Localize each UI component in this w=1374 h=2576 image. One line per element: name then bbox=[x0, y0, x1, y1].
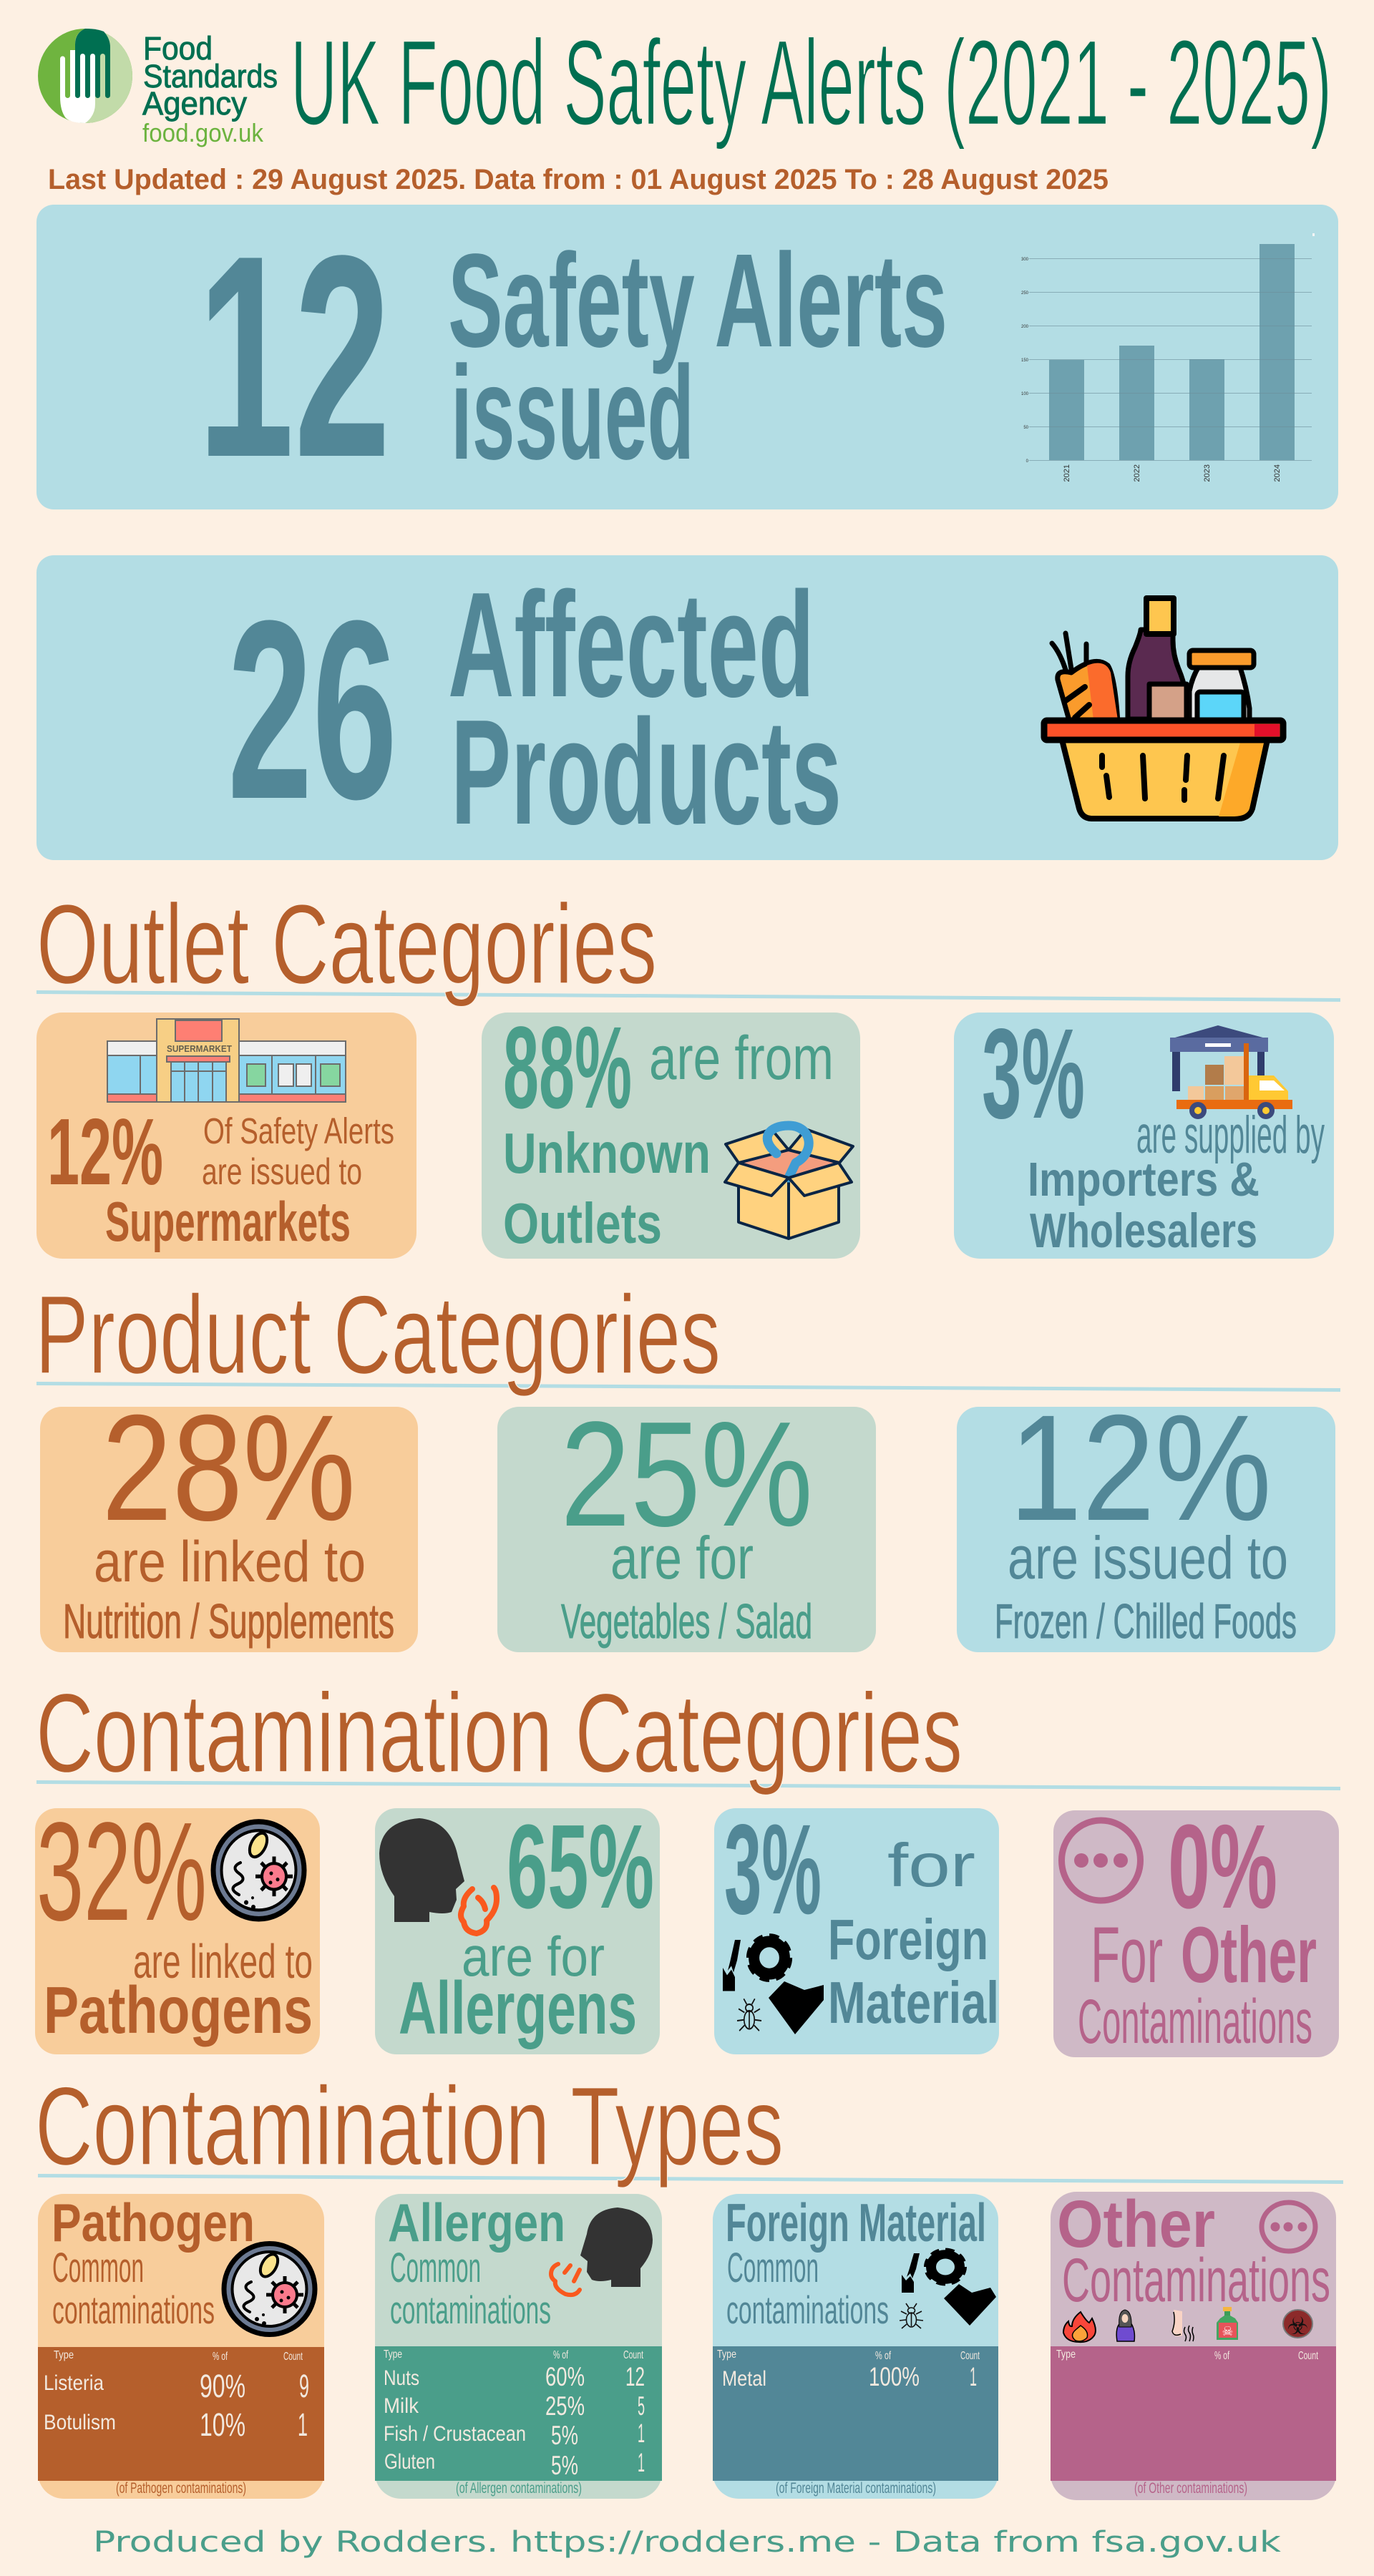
icon: poison bottle: ☠ bbox=[1222, 2324, 1234, 2339]
table: pathogen: Type bbox=[54, 2349, 74, 2361]
logo: Food Standards Agency bbox=[38, 29, 278, 147]
footnote: other: (of Other contaminations) bbox=[1134, 2480, 1247, 2497]
panel: supermarkets: SUPERMARKET bbox=[167, 1043, 232, 1054]
footnote: foreign material: (of Foreign Material contaminations) bbox=[776, 2480, 936, 2497]
panel: importers and wholesalers bbox=[954, 1002, 1334, 1259]
text: for: for bbox=[887, 1832, 975, 1900]
heading: outlet categories: Outlet Categories bbox=[36, 882, 657, 1008]
stat: 0 percent: 0% bbox=[1168, 1800, 1277, 1933]
text: pathogens: Pathogens bbox=[44, 1973, 313, 2047]
table: pathogen: 9 bbox=[299, 2368, 309, 2404]
table: pathogen bbox=[38, 2347, 324, 2481]
text: common: Common bbox=[52, 2245, 144, 2291]
bar chart: alerts per year: 250 bbox=[1021, 291, 1029, 296]
icon: head coughing bbox=[379, 1818, 497, 1933]
icon: person with hand at mouth bbox=[1116, 2310, 1134, 2341]
logo: Food Standards Agency: food.gov.uk bbox=[142, 118, 264, 147]
icon: poison bottle bbox=[1217, 2307, 1238, 2340]
table: allergen: 12 bbox=[625, 2362, 645, 2391]
table: allergen: 5 bbox=[638, 2391, 645, 2421]
table: pathogen: Listeria bbox=[44, 2371, 104, 2395]
table: pathogen: 10% bbox=[200, 2406, 245, 2443]
panel: allergens bbox=[375, 1800, 660, 2054]
stat: 32 percent: 32% bbox=[36, 1793, 207, 1950]
panel: other contaminations bbox=[1053, 1800, 1339, 2057]
table: other: % of bbox=[1214, 2350, 1229, 2362]
icon: supermarket bbox=[107, 1019, 346, 1102]
text: are for: are for bbox=[610, 1524, 754, 1591]
panel: supermarkets bbox=[36, 1013, 416, 1259]
big number 12: 12 bbox=[198, 196, 391, 517]
text: allergens: Allergens bbox=[399, 1967, 637, 2050]
last updated line: Last Updated : 29 August 2025. Data from : 01 August 2025 To : 28 August 2025 bbox=[48, 164, 1109, 195]
table: allergen: 1 bbox=[638, 2448, 645, 2477]
bar chart: alerts per year: 200 bbox=[1021, 325, 1029, 329]
logo: Food Standards Agency: Food bbox=[143, 30, 213, 67]
text: of safety alerts: Of Safety Alerts bbox=[203, 1111, 394, 1151]
table: allergen: % of bbox=[553, 2349, 568, 2361]
heading: allergen: Allergen bbox=[388, 2192, 565, 2253]
table: allergen: Fish / Crustacean bbox=[384, 2422, 526, 2446]
icon: foreign material bbox=[723, 1937, 824, 2034]
bar chart: alerts per year: 100 bbox=[1021, 392, 1029, 396]
stat: 25 percent: 25% bbox=[560, 1391, 813, 1558]
icon: ellipsis circle bbox=[1062, 1820, 1141, 1901]
big number 26: 26 bbox=[228, 568, 397, 852]
table: allergen: Type bbox=[384, 2348, 402, 2361]
table: pathogen: 1 bbox=[298, 2406, 308, 2443]
table: other bbox=[1051, 2346, 1336, 2481]
heading: foreign material: Foreign Material bbox=[726, 2192, 986, 2253]
text: are issued to: are issued to bbox=[1008, 1524, 1288, 1591]
text: are issued to: are issued to bbox=[202, 1151, 362, 1193]
table: pathogen: 90% bbox=[200, 2368, 245, 2404]
bar chart: alerts per year: 2022 bbox=[1133, 464, 1141, 482]
panel: vegetables and salad bbox=[497, 1391, 876, 1652]
table: allergen: Milk bbox=[384, 2394, 419, 2418]
stat: 28 percent: 28% bbox=[102, 1383, 356, 1552]
text: contaminations: contaminations bbox=[390, 2288, 551, 2332]
bar chart: alerts per year: 2021 bbox=[1063, 464, 1071, 482]
panel: other types table bbox=[1051, 2187, 1336, 2500]
table: foreign material: Type bbox=[717, 2348, 736, 2361]
text: supermarkets: Supermarkets bbox=[105, 1190, 351, 1253]
stat: 12 percent: 12% bbox=[1009, 1383, 1272, 1552]
table: other: Type bbox=[1056, 2348, 1076, 2361]
heading: product categories: Product Categories bbox=[35, 1273, 721, 1397]
footnote: pathogen: (of Pathogen contaminations) bbox=[116, 2480, 246, 2497]
text: are for: are for bbox=[462, 1925, 605, 1988]
heading: contamination categories: Contamination Categories bbox=[36, 1671, 963, 1796]
text: are linked to: are linked to bbox=[94, 1530, 366, 1594]
text: foreign: Foreign bbox=[828, 1908, 988, 1971]
table: foreign material: Metal bbox=[722, 2367, 766, 2391]
heading: pathogen: Pathogen bbox=[52, 2192, 255, 2253]
footnote: allergen: (of Allergen contaminations) bbox=[456, 2480, 582, 2497]
heading: other: Other bbox=[1057, 2187, 1215, 2261]
icon: petri dish bbox=[222, 2241, 318, 2337]
table: allergen: 5% bbox=[551, 2451, 578, 2480]
stat: 12 percent: 12% bbox=[47, 1099, 163, 1204]
text: nutrition supplements: Nutrition / Supplements bbox=[63, 1594, 394, 1649]
text: contaminations: contaminations bbox=[726, 2288, 889, 2332]
table: allergen: Count bbox=[623, 2349, 643, 2361]
panel: safety alerts bbox=[36, 196, 1338, 517]
heading: contamination types: Contamination Types bbox=[35, 2064, 784, 2189]
logo: Food Standards Agency: Standards bbox=[143, 58, 278, 94]
text: common: Common bbox=[390, 2245, 481, 2291]
bar chart: alerts per year: 300 bbox=[1021, 258, 1029, 262]
text: wholesalers: Wholesalers bbox=[1030, 1204, 1257, 1258]
text: safety alerts: Safety Alerts bbox=[448, 227, 947, 375]
panel: foreign material bbox=[714, 1797, 999, 2054]
panel: frozen and chilled foods bbox=[957, 1383, 1335, 1652]
table: pathogen: Count bbox=[283, 2351, 303, 2363]
text: material: Material bbox=[828, 1969, 999, 2036]
text: are linked to: are linked to bbox=[133, 1935, 313, 1989]
panel: pathogen types table bbox=[38, 2192, 324, 2499]
table: pathogen: Botulism bbox=[44, 2411, 116, 2434]
icon: box with question mark bbox=[725, 1126, 853, 1239]
text: products: Products bbox=[451, 689, 842, 856]
bar chart: alerts per year bbox=[1021, 233, 1315, 482]
table: foreign material: Count bbox=[960, 2350, 980, 2362]
stat: 65 percent: 65% bbox=[507, 1800, 654, 1933]
icon: biohazard: ☣ bbox=[1287, 2312, 1309, 2341]
bar chart: alerts per year: 0 bbox=[1026, 459, 1029, 464]
table: pathogen: % of bbox=[213, 2351, 228, 2363]
panel: allergen types table bbox=[375, 2192, 662, 2499]
table: other: Count bbox=[1298, 2350, 1318, 2362]
table: allergen: 25% bbox=[545, 2391, 585, 2421]
bar chart: alerts per year: 2023 bbox=[1203, 464, 1212, 482]
stat: 3 percent: 3% bbox=[982, 1002, 1085, 1145]
text: are from: are from bbox=[649, 1024, 834, 1093]
bar chart: alerts per year: 50 bbox=[1023, 426, 1029, 430]
text: affected: Affected bbox=[448, 562, 814, 728]
bar chart: alerts per year: 150 bbox=[1021, 358, 1029, 363]
icon: flame bbox=[1063, 2312, 1096, 2342]
bar chart: alerts per year: 2024 bbox=[1273, 464, 1282, 482]
text: for: For bbox=[1091, 1911, 1163, 1999]
table: allergen: 60% bbox=[545, 2362, 585, 2391]
icon: ellipsis circle bbox=[1262, 2202, 1315, 2251]
panel: nutrition and supplements bbox=[40, 1383, 418, 1652]
table: allergen: 5% bbox=[551, 2421, 578, 2450]
stat: 88 percent: 88% bbox=[503, 1002, 632, 1133]
text: issued: issued bbox=[451, 339, 694, 487]
table: foreign material: % of bbox=[875, 2350, 891, 2362]
stat: 3 percent: 3% bbox=[724, 1797, 822, 1941]
table: foreign material bbox=[713, 2346, 998, 2481]
icon: foreign material bbox=[900, 2250, 996, 2328]
logo: Food Standards Agency: Agency bbox=[142, 85, 247, 122]
table: allergen bbox=[375, 2346, 662, 2481]
text: contaminations: contaminations bbox=[52, 2288, 215, 2332]
text: outlets: Outlets bbox=[503, 1191, 662, 1255]
icon: warehouse and truck bbox=[1170, 1025, 1292, 1119]
panel: affected products bbox=[36, 555, 1338, 860]
footer credit: Produced by Rodders. https://rodders.me - Data from fsa.gov.uk bbox=[93, 2526, 1282, 2559]
panel: foreign material types table bbox=[713, 2192, 998, 2499]
table: allergen: Nuts bbox=[384, 2366, 419, 2390]
text: vegetables salad: Vegetables / Salad bbox=[561, 1594, 812, 1649]
panel: pathogens bbox=[35, 1793, 320, 2054]
icon: head coughing bbox=[551, 2207, 653, 2295]
icon: shopping basket bbox=[1044, 598, 1283, 819]
icon: petri dish bbox=[210, 1819, 306, 1921]
table: allergen: 1 bbox=[638, 2419, 645, 2448]
panel: unknown outlets bbox=[482, 1002, 860, 1259]
icon: nose and smell bbox=[1171, 2310, 1194, 2341]
text: importers: Importers & bbox=[1028, 1153, 1260, 1206]
table: foreign material: 1 bbox=[970, 2362, 977, 2391]
text: common: Common bbox=[727, 2245, 819, 2291]
table: foreign material: 100% bbox=[869, 2362, 920, 2391]
table: allergen: Gluten bbox=[384, 2450, 435, 2474]
icon: biohazard bbox=[1283, 2310, 1312, 2341]
text: unknown: Unknown bbox=[503, 1121, 711, 1185]
